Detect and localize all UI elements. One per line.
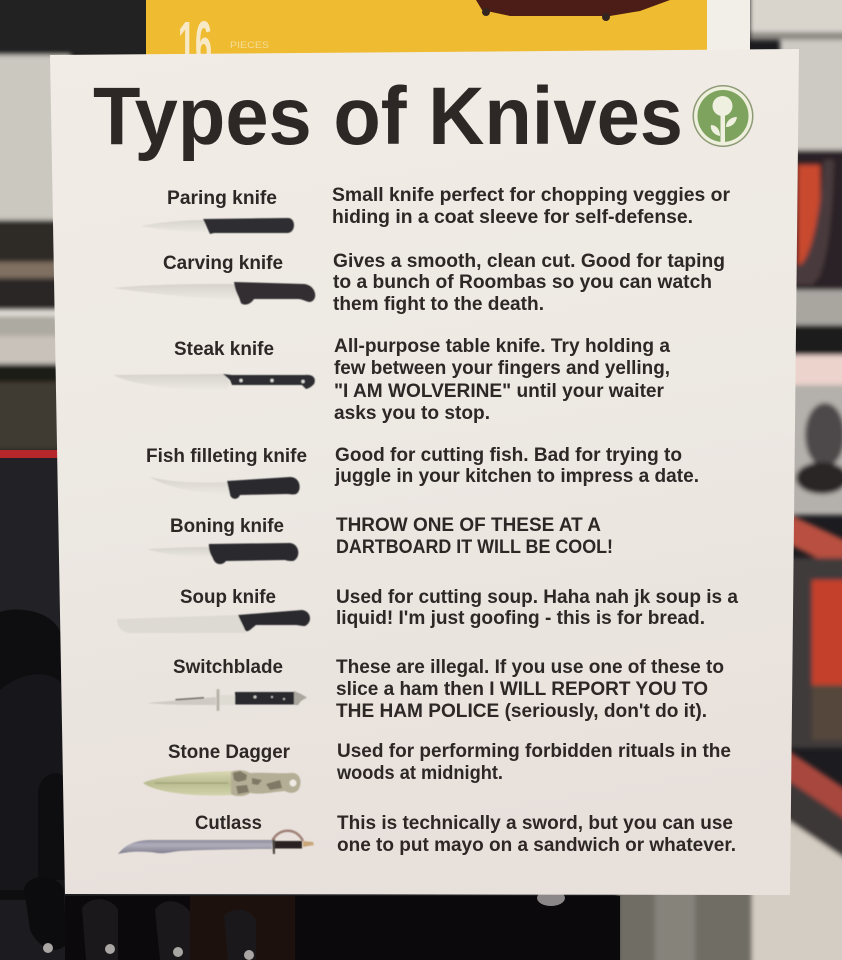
description: fish filleting knife: Good for cutting fish. Bad for trying to: [335, 445, 682, 466]
left shelves: [0, 0, 150, 56]
description: paring knife: Small knife perfect for chopping veggies or: [332, 185, 731, 206]
description: carving knife: Gives a smooth, clean cut. Good for taping: [333, 251, 725, 272]
row: steak knife: [113, 336, 674, 424]
label: cutlass: Cutlass: [195, 813, 262, 834]
label: switchblade: Switchblade: [173, 657, 283, 678]
icon: green sprout logo: [692, 85, 754, 147]
description: soup knife: Used for cutting soup. Haha nah jk soup is a: [336, 587, 738, 608]
white poster card: [50, 49, 799, 895]
store shelf background: PIECES: [230, 40, 269, 50]
description: boning knife: THROW ONE OF THESE AT A: [336, 515, 601, 536]
icon: stone dagger: [143, 770, 301, 796]
icon: fish filleting knife: [150, 477, 300, 499]
row: switchblade: [147, 657, 728, 722]
description: steak knife: asks you to stop.: [334, 403, 490, 424]
title: Types of Knives: [93, 71, 683, 162]
description: cutlass: one to put mayo on a sandwich or whatever.: [337, 835, 736, 856]
row: boning knife: [147, 515, 613, 564]
label: boning knife: Boning knife: [170, 516, 284, 537]
icon: boning knife: [147, 543, 298, 564]
description: carving knife: them fight to the death.: [333, 294, 544, 315]
description: stone dagger: woods at midnight.: [336, 763, 503, 784]
description: cutlass: This is technically a sword, but you can use: [337, 813, 733, 834]
description: switchblade: slice a ham then I WILL REPORT YOU TO: [336, 679, 708, 700]
description: soup knife: liquid! I'm just goofing - this is for bread.: [336, 608, 705, 629]
yellow knife set box: [146, 0, 707, 56]
label: steak knife: Steak knife: [174, 339, 274, 360]
label: fish filleting knife: Fish filleting knife: [146, 446, 307, 467]
icon: switchblade: [147, 689, 307, 711]
description: steak knife: "I AM WOLVERINE" until your waiter: [334, 381, 665, 402]
icon: cutlass: [118, 831, 314, 854]
bottom: [618, 880, 752, 960]
row: stone dagger: [143, 741, 735, 796]
description: switchblade: These are illegal. If you use one of these to: [336, 657, 724, 678]
row: cutlass: [118, 813, 737, 856]
description: switchblade: THE HAM POLICE (seriously, don't do it).: [336, 701, 707, 722]
icon: paring knife: [141, 218, 294, 234]
row: carving knife: [113, 251, 729, 315]
icon: steak knife: [113, 374, 315, 390]
row: soup knife: [117, 587, 742, 633]
right wall and shelves: [750, 0, 842, 34]
icon: soup knife: [117, 610, 310, 633]
black knife block handles: [0, 609, 620, 960]
red shelf strip: [0, 450, 60, 458]
label: soup knife: Soup knife: [180, 587, 276, 608]
description: carving knife: to a bunch of Roombas so you can watch: [333, 272, 712, 293]
store shelf background: 16: [178, 8, 212, 80]
description: paring knife: hiding in a coat sleeve for self-defense.: [332, 207, 693, 228]
label: stone dagger: Stone Dagger: [168, 742, 291, 763]
description: steak knife: All-purpose table knife. Try holding a: [334, 336, 670, 357]
row: paring knife: [141, 185, 734, 234]
description: fish filleting knife: juggle in your kitchen to impress a date.: [334, 466, 699, 487]
row: fish filleting knife: [146, 445, 699, 499]
description: stone dagger: Used for performing forbidden rituals in the: [337, 741, 731, 762]
label: carving knife: Carving knife: [163, 253, 283, 274]
label: paring knife: Paring knife: [167, 188, 277, 209]
icon: carving knife: [113, 282, 315, 305]
description: boning knife: DARTBOARD IT WILL BE COOL!: [336, 537, 613, 558]
description: steak knife: few between your fingers and yelling,: [334, 358, 670, 379]
